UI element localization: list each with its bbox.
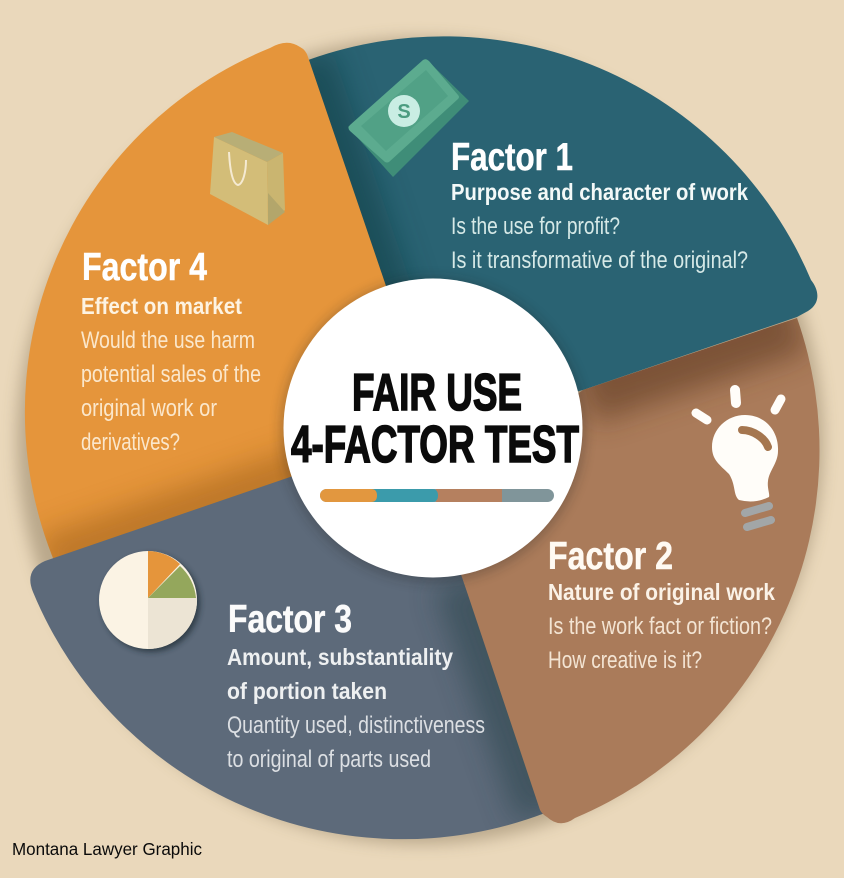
text block: factor 4 question: potential sales of the bbox=[81, 361, 261, 388]
caption: Montana Lawyer Graphic bbox=[12, 839, 202, 859]
subheading: factor 3: Amount, substantiality bbox=[227, 644, 453, 670]
title bbox=[291, 364, 579, 474]
color key bar bbox=[320, 489, 554, 502]
icon: shopping bag bbox=[210, 132, 285, 225]
text block: factor 3 description: Quantity used, distinctiveness bbox=[227, 712, 485, 739]
text block: factor 4 question: original work or bbox=[81, 395, 217, 422]
text block: factor 1 questions bbox=[451, 213, 748, 274]
title: FAIR USE bbox=[352, 364, 522, 422]
icon: pie chart bbox=[99, 551, 200, 652]
text block: factor 1 questions: Is it transformative of the original? bbox=[451, 247, 748, 274]
panel: factor 2 bbox=[433, 318, 820, 823]
icon: money bill bbox=[348, 59, 469, 177]
subheading: factor 2: Nature of original work bbox=[548, 579, 776, 605]
heading: factor 2: Factor 2 bbox=[548, 535, 673, 578]
heading: factor 4: Factor 4 bbox=[82, 246, 207, 289]
title: 4-FACTOR TEST bbox=[291, 416, 579, 474]
text block: factor 2 questions bbox=[548, 613, 772, 674]
text block: factor 2 questions: How creative is it? bbox=[548, 647, 702, 674]
panel: factor 4 bbox=[24, 42, 386, 558]
subheading: factor 4: Effect on market bbox=[81, 293, 242, 319]
subheading: factor 1: Purpose and character of work bbox=[451, 179, 749, 205]
icon: light bulb bbox=[696, 390, 781, 527]
text block: factor 4 question: Would the use harm bbox=[81, 327, 255, 354]
subheading: factor 3: of portion taken bbox=[227, 678, 387, 704]
text block: factor 3 description bbox=[227, 712, 485, 773]
text block: factor 2 questions: Is the work fact or fiction? bbox=[548, 613, 772, 640]
text block: factor 4 question: derivatives? bbox=[81, 429, 180, 456]
subheading: factor 3 bbox=[227, 644, 453, 704]
text block: factor 4 question bbox=[81, 327, 261, 456]
heading: factor 3: Factor 3 bbox=[228, 598, 352, 641]
text block: factor 1 questions: Is the use for profit? bbox=[451, 213, 620, 240]
panel: factor 3 bbox=[30, 476, 543, 840]
icon: money bill: S bbox=[397, 101, 411, 123]
panel: center circle bbox=[281, 278, 585, 582]
text block: factor 3 description: to original of parts used bbox=[227, 746, 431, 773]
heading: factor 1: Factor 1 bbox=[451, 136, 573, 179]
panel: factor 1 bbox=[309, 36, 818, 392]
